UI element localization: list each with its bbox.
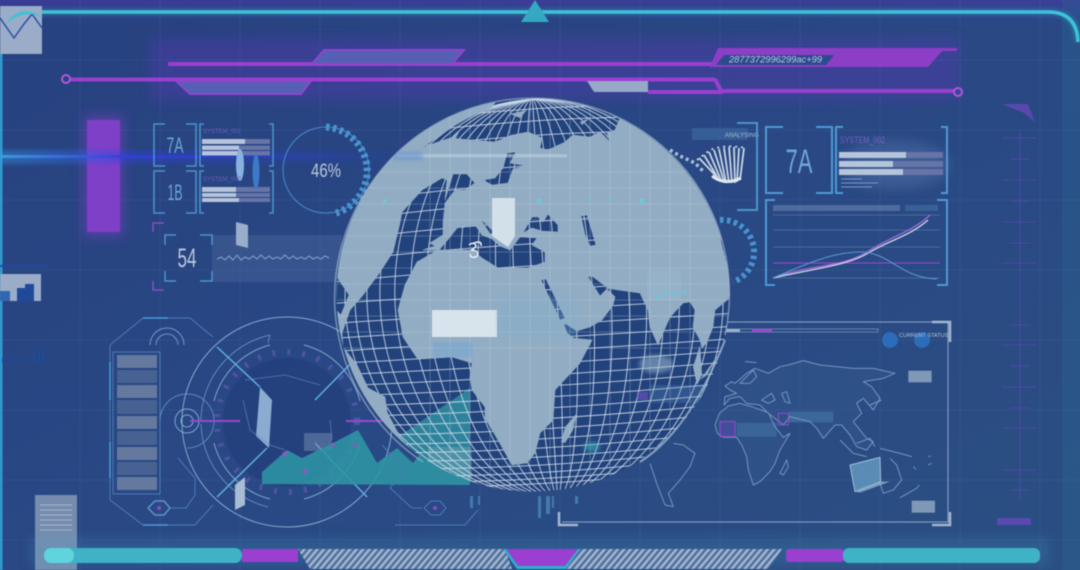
- panel: left status bars: [200, 124, 273, 213]
- gauge: 46 percent: 46%: [311, 161, 341, 182]
- panel: 7A label right: 7A: [786, 143, 813, 181]
- icon: curly glyph: [469, 242, 481, 257]
- globe: [333, 96, 731, 492]
- ocean disc: [336, 98, 730, 492]
- panel: radar scope: [182, 317, 392, 527]
- panel: 7A label left: [154, 124, 196, 166]
- DNA helix icon: ANALYSING: [725, 133, 759, 139]
- line chart: [766, 200, 947, 285]
- right ring gauge: [720, 220, 754, 282]
- readout trapezoid with code: [710, 48, 957, 67]
- data overlays on globe: [383, 152, 710, 452]
- globe meridians and parallels: [336, 98, 730, 492]
- right bracket: [737, 123, 757, 210]
- panel: 7A label right: [766, 127, 832, 193]
- DNA helix icon: [670, 128, 759, 183]
- blue lens flare: [0, 150, 420, 164]
- top-left mini chart: [0, 6, 44, 54]
- bottom status bar: [30, 538, 1050, 569]
- panel: right status bars: SYSTEM_002: [840, 135, 885, 145]
- bottom data ticks: [470, 496, 578, 518]
- islands and islets: [450, 110, 718, 443]
- panel: left status bars: SYSTEM_002: [203, 177, 242, 183]
- landmass: [336, 102, 730, 466]
- panel: world map frame: CURRENT STATUS: [899, 333, 949, 339]
- panel: world map frame: [559, 322, 950, 525]
- panel: 7A label left: 7A: [166, 133, 184, 158]
- left tick bars: [2, 348, 44, 363]
- bottom-left gray panel: [35, 495, 77, 570]
- globe edge highlight: [335, 98, 729, 462]
- panel: left status bars: SYSTEM_001: [203, 129, 242, 135]
- panel: right status bars: [836, 127, 950, 193]
- world map outline: [650, 361, 935, 513]
- lower purple connector: [62, 75, 962, 96]
- panel: 54 readout with waveform: [153, 222, 342, 290]
- right radar wing: [382, 445, 478, 525]
- panel: left octagon menu: [110, 318, 214, 525]
- panel: 1B label left: [154, 171, 196, 213]
- left small bar chart: [0, 265, 48, 301]
- right vertical scale: [997, 104, 1036, 525]
- upper purple connector: [168, 50, 713, 66]
- readout trapezoid with code: 2877372996299ac+99: [728, 54, 822, 64]
- area chart teal: [262, 390, 470, 485]
- panel: 1B label left: 1B: [168, 180, 182, 205]
- icon: top triangle marker: [521, 0, 549, 22]
- gauge: 46 percent: [283, 127, 369, 213]
- panel: 54 readout with waveform: 54: [178, 243, 196, 273]
- faint grid over land: [337, 100, 730, 500]
- purple vertical block: [84, 116, 123, 236]
- teal through ocean: [398, 388, 470, 485]
